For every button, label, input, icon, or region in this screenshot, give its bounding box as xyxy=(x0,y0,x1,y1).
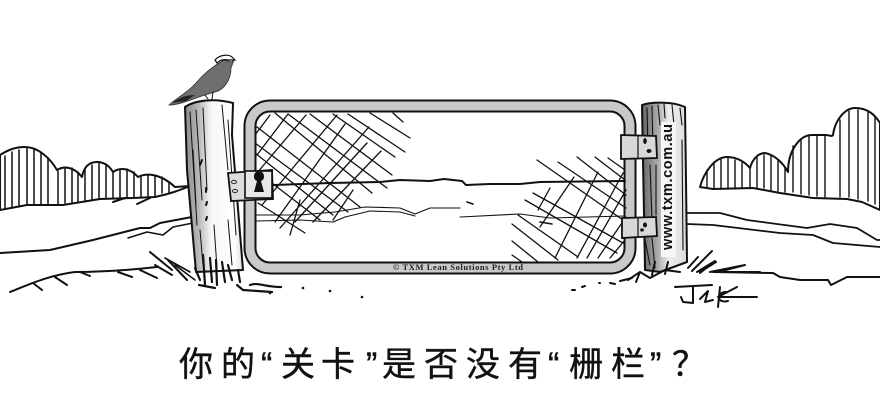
post website text: www.txm.com.au xyxy=(660,124,676,251)
right ground lines xyxy=(687,213,880,285)
upper hinge xyxy=(621,135,657,159)
bird on post xyxy=(169,55,235,105)
left background hills xyxy=(0,147,190,210)
landscape seen through gate xyxy=(256,179,625,224)
left fence post xyxy=(185,100,243,272)
left ground lines xyxy=(0,198,193,292)
scattered ground dots xyxy=(269,287,363,298)
caption: 你的“关卡”是否没有“栅栏”？ xyxy=(179,346,706,384)
lower hinge xyxy=(622,217,657,238)
artist signature xyxy=(675,285,757,307)
latch plate with keyhole xyxy=(228,170,273,201)
right grass tuft xyxy=(572,251,760,290)
left wire mesh xyxy=(255,113,410,235)
right wire mesh xyxy=(512,157,626,262)
gate frame xyxy=(250,106,630,268)
gate copyright text: © TXM Lean Solutions Pty Ltd xyxy=(393,262,523,272)
left grass tuft xyxy=(165,255,281,292)
right background hills xyxy=(700,108,880,210)
right fence post xyxy=(642,103,687,272)
